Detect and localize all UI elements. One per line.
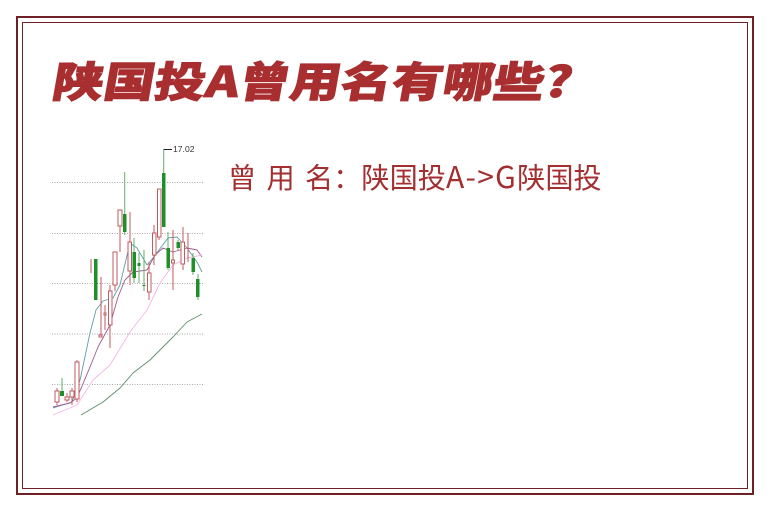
candlestick chart [52, 144, 203, 416]
high price label: 17.02 [173, 144, 195, 154]
high price label [164, 144, 195, 154]
green candles [60, 150, 200, 396]
grid lines [52, 182, 203, 384]
alias text: 曾 用 名：陕国投A->G陕国投 [228, 153, 602, 197]
red candles [55, 189, 188, 405]
title: 陕国投A曾用名有哪些? [50, 50, 578, 110]
moving average lines [53, 237, 202, 415]
